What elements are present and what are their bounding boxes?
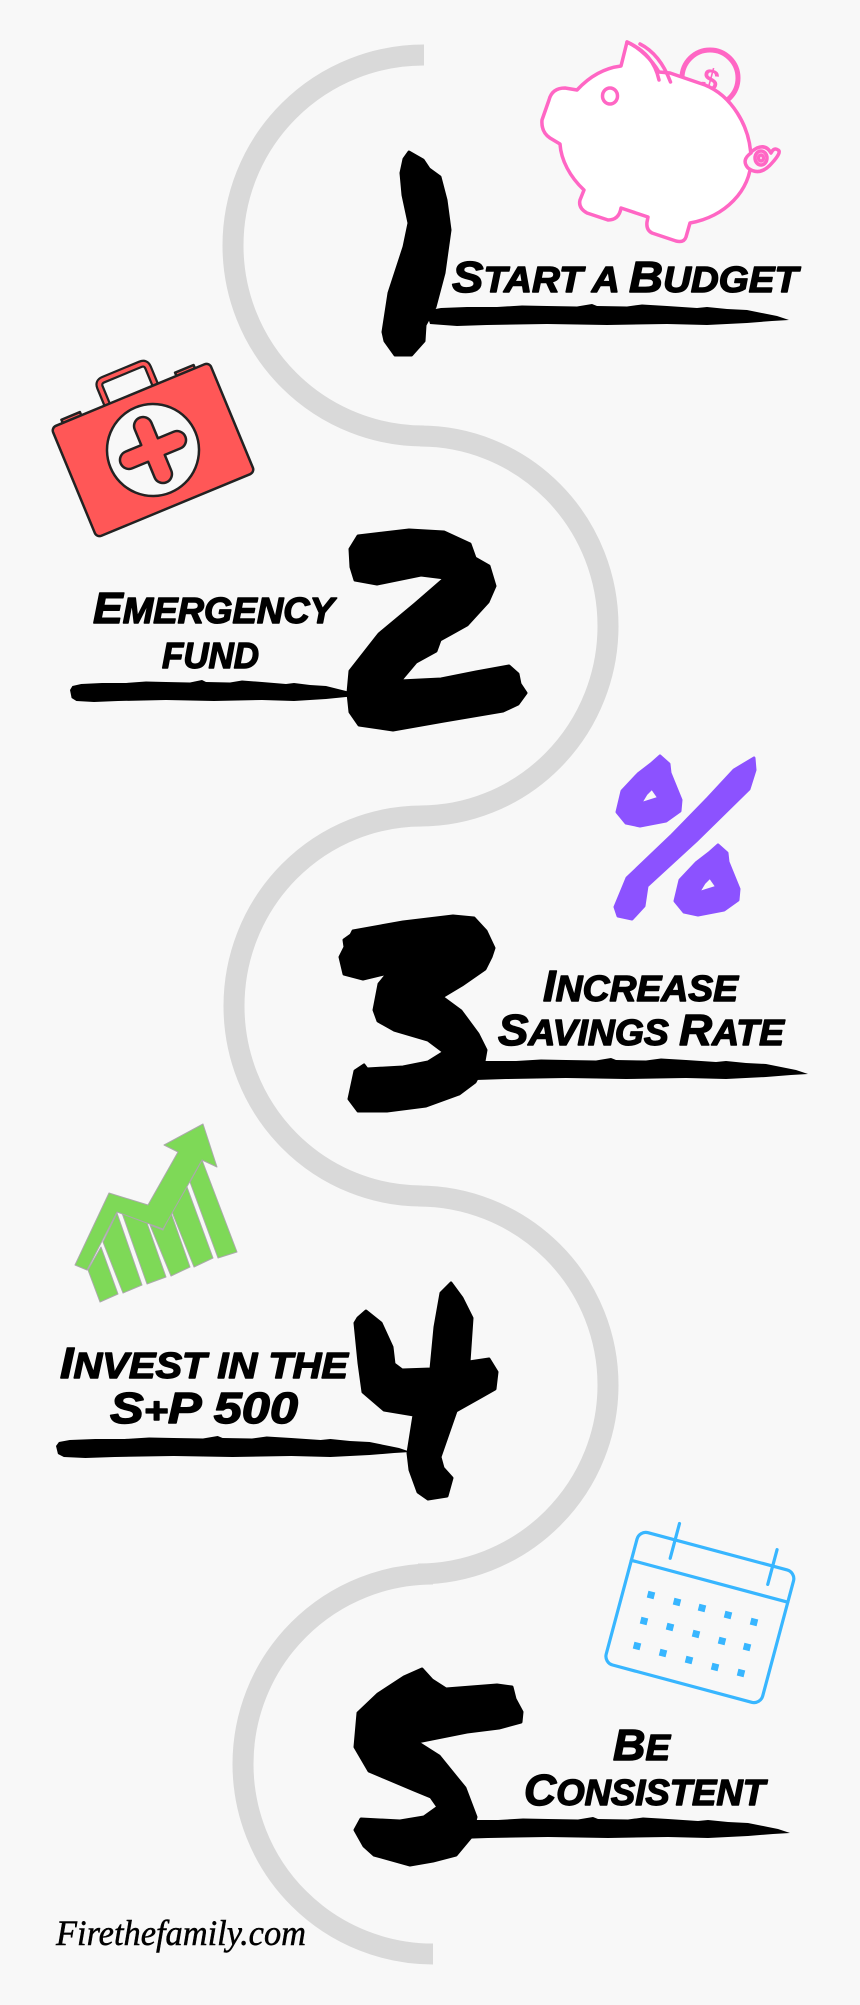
numeral 4 <box>355 1283 497 1499</box>
icon: piggy bank: $ <box>698 62 723 98</box>
label: Be Consistent: BE <box>613 1721 671 1770</box>
brush underline 2 <box>70 680 360 702</box>
numeral 2 <box>348 530 526 730</box>
numeral 3 <box>340 916 494 1111</box>
label: Increase Savings Rate <box>498 962 785 1055</box>
label: Increase Savings Rate: INCREASE <box>543 962 739 1011</box>
step 4 <box>56 1124 497 1499</box>
icon: first aid case <box>42 340 255 538</box>
icon: percent sign <box>615 756 755 919</box>
brush underline 1 <box>427 304 789 326</box>
label: Start a Budget: START A BUDGET <box>452 253 801 302</box>
brush underline 3 <box>446 1058 808 1080</box>
icon: calendar <box>604 1514 800 1705</box>
step 1 <box>383 42 801 355</box>
step 2 <box>42 340 526 730</box>
step 5 <box>355 1514 800 1865</box>
winding grey path <box>233 55 608 1954</box>
numeral 1 <box>383 152 450 355</box>
brush underline 5 <box>428 1817 790 1839</box>
label: Invest in the S+P 500 <box>60 1339 349 1433</box>
label: Emergency fund: FUND <box>162 635 259 676</box>
icon: rising bar chart <box>75 1124 237 1302</box>
numeral 5 <box>355 1669 522 1865</box>
step 3 <box>340 756 808 1111</box>
label: Emergency fund <box>93 584 337 676</box>
icon: piggy bank <box>542 42 779 242</box>
label: Invest in the S+P 500: S+P 500 <box>110 1384 299 1433</box>
label: Increase Savings Rate: SAVINGS RATE <box>498 1006 785 1055</box>
label: Be Consistent <box>524 1721 768 1815</box>
footer website: Firethefamily.com <box>55 1913 306 1953</box>
label: Be Consistent: CONSISTENT <box>524 1766 768 1815</box>
label: Invest in the S+P 500: INVEST IN THE <box>60 1339 349 1388</box>
label: Emergency fund: EMERGENCY <box>93 584 337 633</box>
brush underline 4 <box>56 1436 411 1458</box>
